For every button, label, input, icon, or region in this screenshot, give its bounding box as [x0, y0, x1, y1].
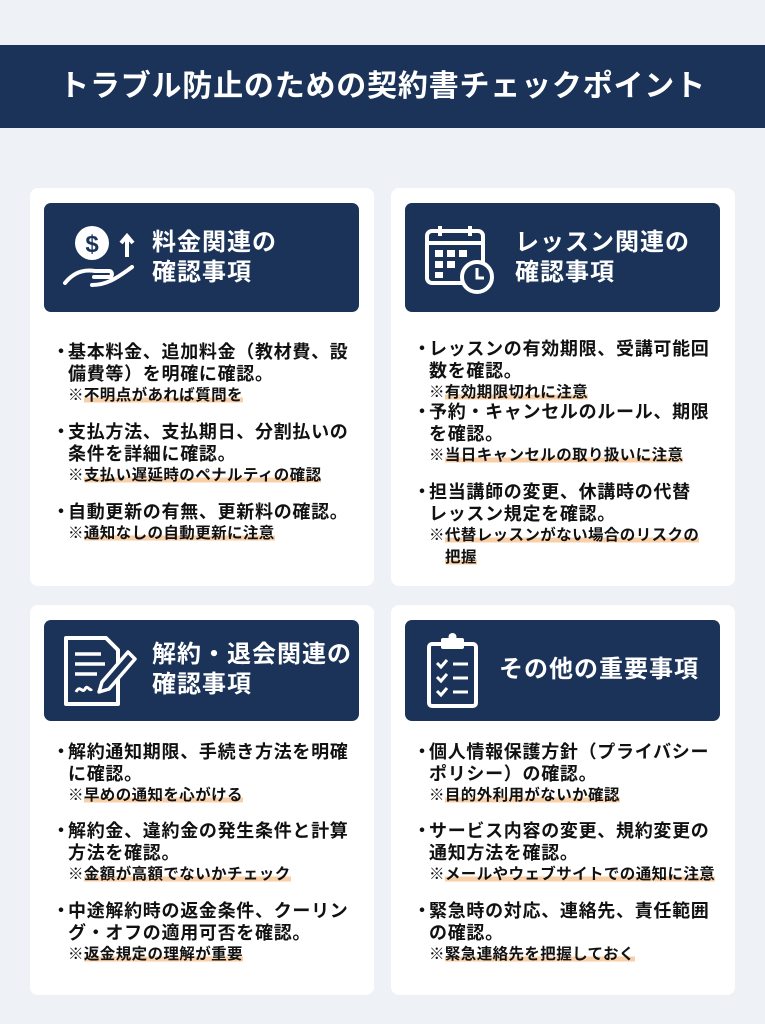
item 1: レッスンの有効期限、受講可能回: [429, 339, 710, 359]
item 3: の確認。: [429, 923, 504, 943]
item 2: ※支払い遅延時のペナルティの確認: [68, 467, 321, 484]
header text: [152, 641, 352, 698]
item 3: 緊急時の対応、連絡先、責任範囲: [429, 901, 710, 921]
item 1: ・: [52, 742, 71, 762]
item 3: ・: [413, 901, 432, 921]
item 2: ※当日キャンセルの取り扱いに注意: [429, 447, 683, 464]
header: cancellation: [44, 620, 359, 721]
header text: 確認事項: [515, 259, 615, 286]
item 2: 方法を確認。: [68, 843, 180, 863]
item 1: ※不明点があれば質問を: [68, 387, 243, 404]
item 1: ポリシー）の確認。: [429, 764, 597, 784]
item 2: ・: [413, 402, 432, 422]
item 1: ・: [413, 742, 432, 762]
item 3: ※緊急連絡先を把握しておく: [429, 946, 635, 963]
item 3: [413, 901, 710, 963]
item 1: 基本料金、追加料金（教材費、設: [68, 342, 348, 362]
item 2: [52, 422, 348, 484]
item 3: [52, 502, 348, 542]
item 2: 予約・キャンセルのルール、期限: [429, 402, 710, 422]
item 3: レッスン規定を確認。: [429, 504, 616, 524]
header text: 確認事項: [152, 259, 252, 286]
header: other: [405, 620, 720, 721]
item 2: 支払方法、支払期日、分割払いの: [68, 422, 348, 442]
item 1: 解約通知期限、手続き方法を明確: [68, 742, 348, 762]
item 2: [52, 821, 348, 883]
header text: 確認事項: [152, 671, 252, 698]
icon: document pen: [64, 636, 137, 706]
panel: lessons: [391, 188, 735, 586]
item 2: ・: [52, 821, 71, 841]
item 2: 解約金、違約金の発生条件と計算: [68, 821, 348, 841]
item 3: ※通知なしの自動更新に注意: [68, 525, 275, 542]
item 1: 備費等）を明確に確認。: [68, 364, 274, 384]
title: [0, 45, 765, 128]
item 3: ・: [413, 482, 432, 502]
item 1: に確認。: [68, 764, 143, 784]
header text: [515, 229, 690, 286]
header text: 料金関連の: [152, 229, 277, 256]
icon: money hand: [62, 226, 134, 287]
title: トラブル防止のための契約書チェックポイント: [59, 70, 706, 103]
item 2: を確認。: [429, 424, 504, 444]
panel: fees: [30, 188, 374, 586]
item 1: [413, 339, 710, 401]
icon: calendar clock: [425, 226, 494, 294]
header: fees: [44, 203, 359, 312]
item 3: 自動更新の有無、更新料の確認。: [68, 502, 348, 522]
item 3: ・: [52, 901, 71, 921]
header text: 解約・退会関連の: [152, 641, 352, 668]
panel: other: [391, 605, 735, 995]
item 1: ・: [52, 342, 71, 362]
item 2: サービス内容の変更、規約変更の: [429, 821, 710, 841]
item 2: ※金額が高額でないかチェック: [68, 866, 291, 883]
item 3: ※代替レッスンがない場合のリスクの: [429, 527, 699, 544]
item 1: 個人情報保護方針（プライバシー: [429, 742, 709, 762]
icon: clipboard checklist: [427, 633, 478, 708]
item 3: [52, 901, 348, 963]
header text: [152, 229, 277, 286]
item 1: [413, 742, 709, 804]
item 3: 中途解約時の返金条件、クーリン: [68, 901, 348, 921]
header text: その他の重要事項: [499, 656, 699, 683]
item 1: ※有効期限切れに注意: [429, 384, 588, 401]
item 3: グ・オフの適用可否を確認。: [68, 923, 311, 943]
item 3: 把握: [445, 549, 477, 566]
item 2: [413, 402, 710, 464]
item 2: 条件を詳細に確認。: [68, 444, 236, 464]
item 1: ・: [413, 339, 432, 359]
panel: cancellation: [30, 605, 374, 995]
item 1: 数を確認。: [429, 361, 522, 381]
header text: レッスン関連の: [515, 229, 690, 256]
item 1: ※早めの通知を心がける: [68, 787, 243, 804]
item 3: ・: [52, 502, 71, 522]
icon: money hand: $: [85, 231, 99, 258]
item 2: [413, 821, 715, 883]
item 3: [413, 482, 699, 566]
item 2: ・: [52, 422, 71, 442]
item 3: 担当講師の変更、休講時の代替: [429, 482, 691, 502]
item 1: [52, 342, 348, 404]
item 3: ※返金規定の理解が重要: [68, 946, 243, 963]
header: lessons: [405, 203, 720, 312]
item 1: ※目的外利用がないか確認: [429, 787, 620, 804]
item 2: ・: [413, 821, 432, 841]
item 2: ※メールやウェブサイトでの通知に注意: [429, 866, 715, 883]
item 2: 通知方法を確認。: [429, 843, 579, 863]
item 1: [52, 742, 348, 804]
